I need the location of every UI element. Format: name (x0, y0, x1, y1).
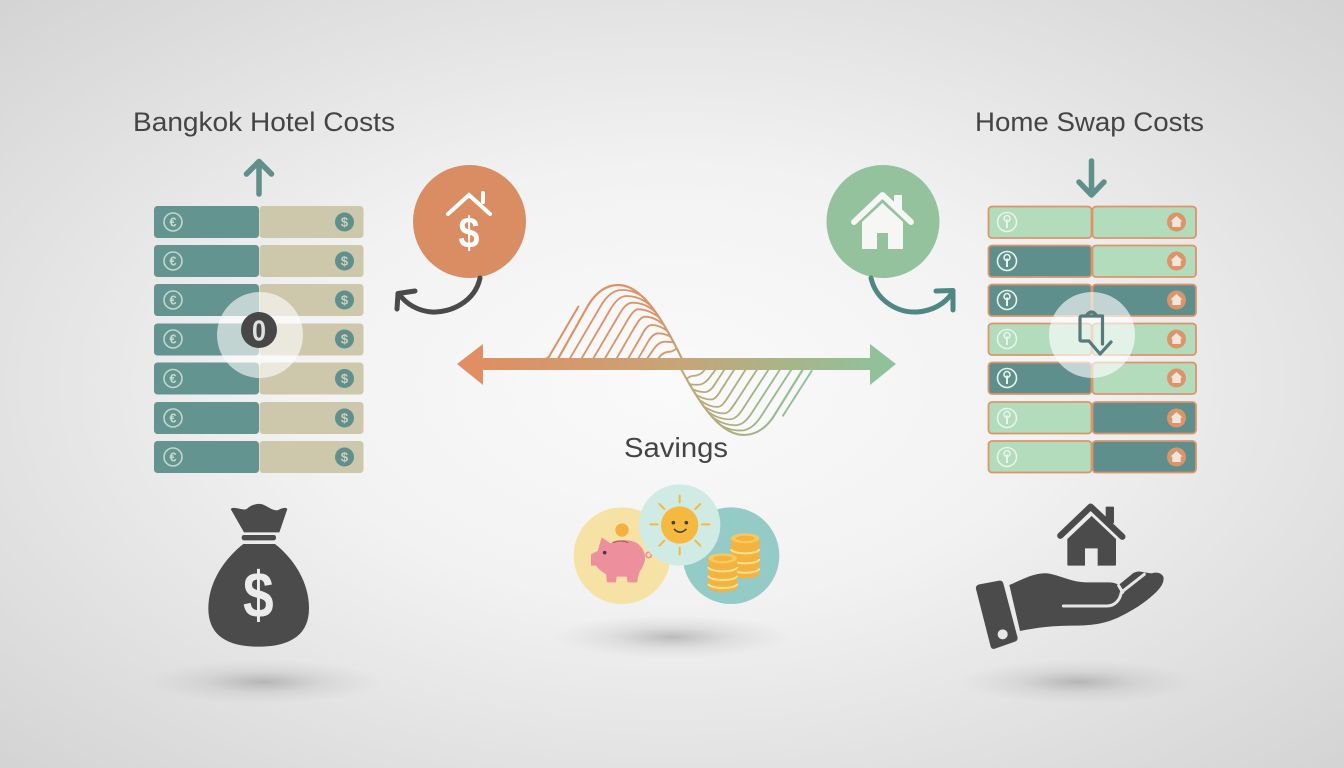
row 5 (154, 362, 364, 394)
row 4 (154, 324, 364, 356)
chart: savings wave (457, 285, 896, 435)
row 1: € (170, 216, 177, 230)
row 1 (154, 206, 364, 238)
row 6 (154, 402, 364, 434)
upper wave lines (542, 285, 682, 359)
lower wave lines (682, 370, 812, 435)
heading: Home Swap Costs: Home Swap Costs (975, 107, 1204, 137)
row 2 (154, 245, 364, 277)
overlay badge: tag with down arrow (1049, 292, 1135, 378)
arrow: curved left (397, 278, 480, 312)
row 7: $ (341, 450, 349, 464)
icon: orange circle with house and dollar: $ (458, 209, 480, 258)
row 2: € (170, 254, 177, 268)
icon: orange circle with house and dollar (413, 165, 526, 278)
overlay badge: zero (217, 292, 303, 378)
heading: Bangkok Hotel Costs: Bangkok Hotel Costs (133, 107, 395, 137)
row 4 (988, 324, 1196, 355)
row 3: $ (341, 292, 349, 308)
icon: smiling sun circle (639, 484, 720, 566)
row 3: € (170, 294, 177, 308)
row 2 (988, 246, 1196, 277)
row 3 (154, 284, 364, 316)
icon: up arrow (246, 162, 272, 194)
icon: hand holding house (976, 507, 1164, 649)
row 5: € (170, 372, 177, 386)
row 4: € (170, 332, 177, 346)
row 3 (988, 284, 1196, 316)
row 2: $ (341, 254, 349, 268)
row 4: $ (341, 332, 349, 346)
icon: piggy bank circle (574, 507, 670, 604)
row 1: $ (341, 214, 349, 230)
icon: money bag: $ (243, 558, 274, 631)
arrow: curved right (871, 278, 953, 312)
row 5 (988, 362, 1196, 394)
row 5: $ (341, 371, 349, 386)
row 1 (988, 206, 1196, 238)
overlay badge: zero: 0 (252, 316, 266, 348)
icon: money bag (208, 504, 309, 647)
icon: coins circle (683, 507, 779, 604)
panel: home swap cost rows (988, 206, 1196, 472)
icon: down arrow (1079, 161, 1104, 195)
double-headed axis arrow (457, 344, 896, 385)
row 6: € (170, 412, 177, 426)
shadow: savings icons (552, 615, 792, 659)
row 6: $ (341, 410, 349, 426)
row 6 (988, 402, 1196, 434)
icon: green circle with house (826, 165, 940, 278)
icon group: savings illustrations (574, 484, 779, 604)
row 7: € (170, 450, 177, 464)
heading: Savings: Savings (624, 432, 728, 463)
row 7 (988, 441, 1196, 472)
shadow: hand (958, 660, 1198, 704)
row 7 (154, 441, 364, 473)
panel: hotel cost rows (154, 206, 364, 473)
shadow: money bag (143, 660, 383, 704)
